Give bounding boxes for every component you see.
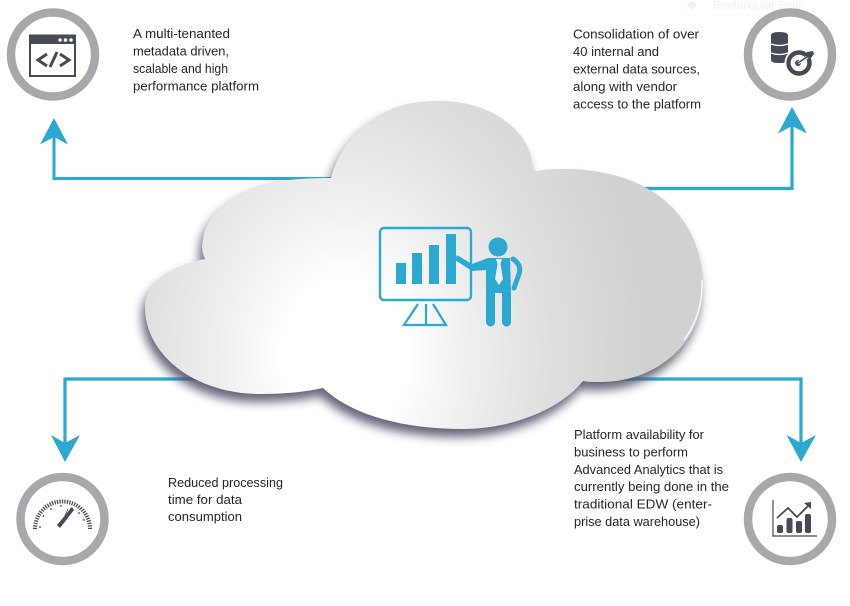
icon: speed gauge in ring <box>20 477 104 561</box>
text: advanced analytics: business to perform <box>574 446 688 460</box>
text: advanced analytics: currently being done in the <box>574 480 729 494</box>
arrow: cloud to bottom-right icon <box>620 379 816 462</box>
arrow: cloud to top-right icon <box>640 107 807 188</box>
board stand <box>404 304 446 325</box>
icon: presenter with bar chart <box>380 228 520 326</box>
presentation board <box>380 228 471 300</box>
text: platform description <box>133 27 259 94</box>
text: processing time: Reduced processing <box>168 476 283 490</box>
text: processing time: time for data <box>168 493 242 507</box>
arrow: cloud to top-left icon <box>40 118 331 178</box>
icon: analytics chart in ring <box>748 477 832 561</box>
icon: code window in ring <box>11 12 95 96</box>
text: processing time: consumption <box>168 510 242 524</box>
text: data sources: external data sources, <box>573 62 700 76</box>
text: platform description: A multi-tenanted <box>133 27 230 41</box>
text: platform description: performance platform <box>133 80 259 94</box>
board bars <box>396 234 456 284</box>
text: advanced analytics: traditional EDW (enter- <box>574 498 712 512</box>
text: platform description: metadata driven, <box>133 44 229 58</box>
text: processing time <box>168 476 283 524</box>
faint screenshot tool ghost label <box>682 0 850 15</box>
text: advanced analytics <box>574 428 729 529</box>
text: data sources: along with vendor <box>573 80 677 94</box>
arrow: cloud to bottom-left icon <box>51 379 200 462</box>
text: data sources: Consolidation of over <box>573 28 699 42</box>
text: advanced analytics: Advanced Analytics that is <box>574 463 723 477</box>
text: advanced analytics: prise data warehouse) <box>574 515 700 529</box>
text: data sources: access to the platform <box>573 98 701 112</box>
faint screenshot tool ghost label: Rectangular Snip <box>713 0 801 12</box>
presenter figure <box>455 238 520 326</box>
text: advanced analytics: Platform availability for <box>574 428 704 442</box>
central cloud <box>142 101 703 437</box>
text: data sources <box>573 28 701 112</box>
text: platform description: scalable and high <box>133 62 228 76</box>
icon: database and target in ring <box>748 12 832 96</box>
text: data sources: 40 internal and <box>573 45 659 59</box>
